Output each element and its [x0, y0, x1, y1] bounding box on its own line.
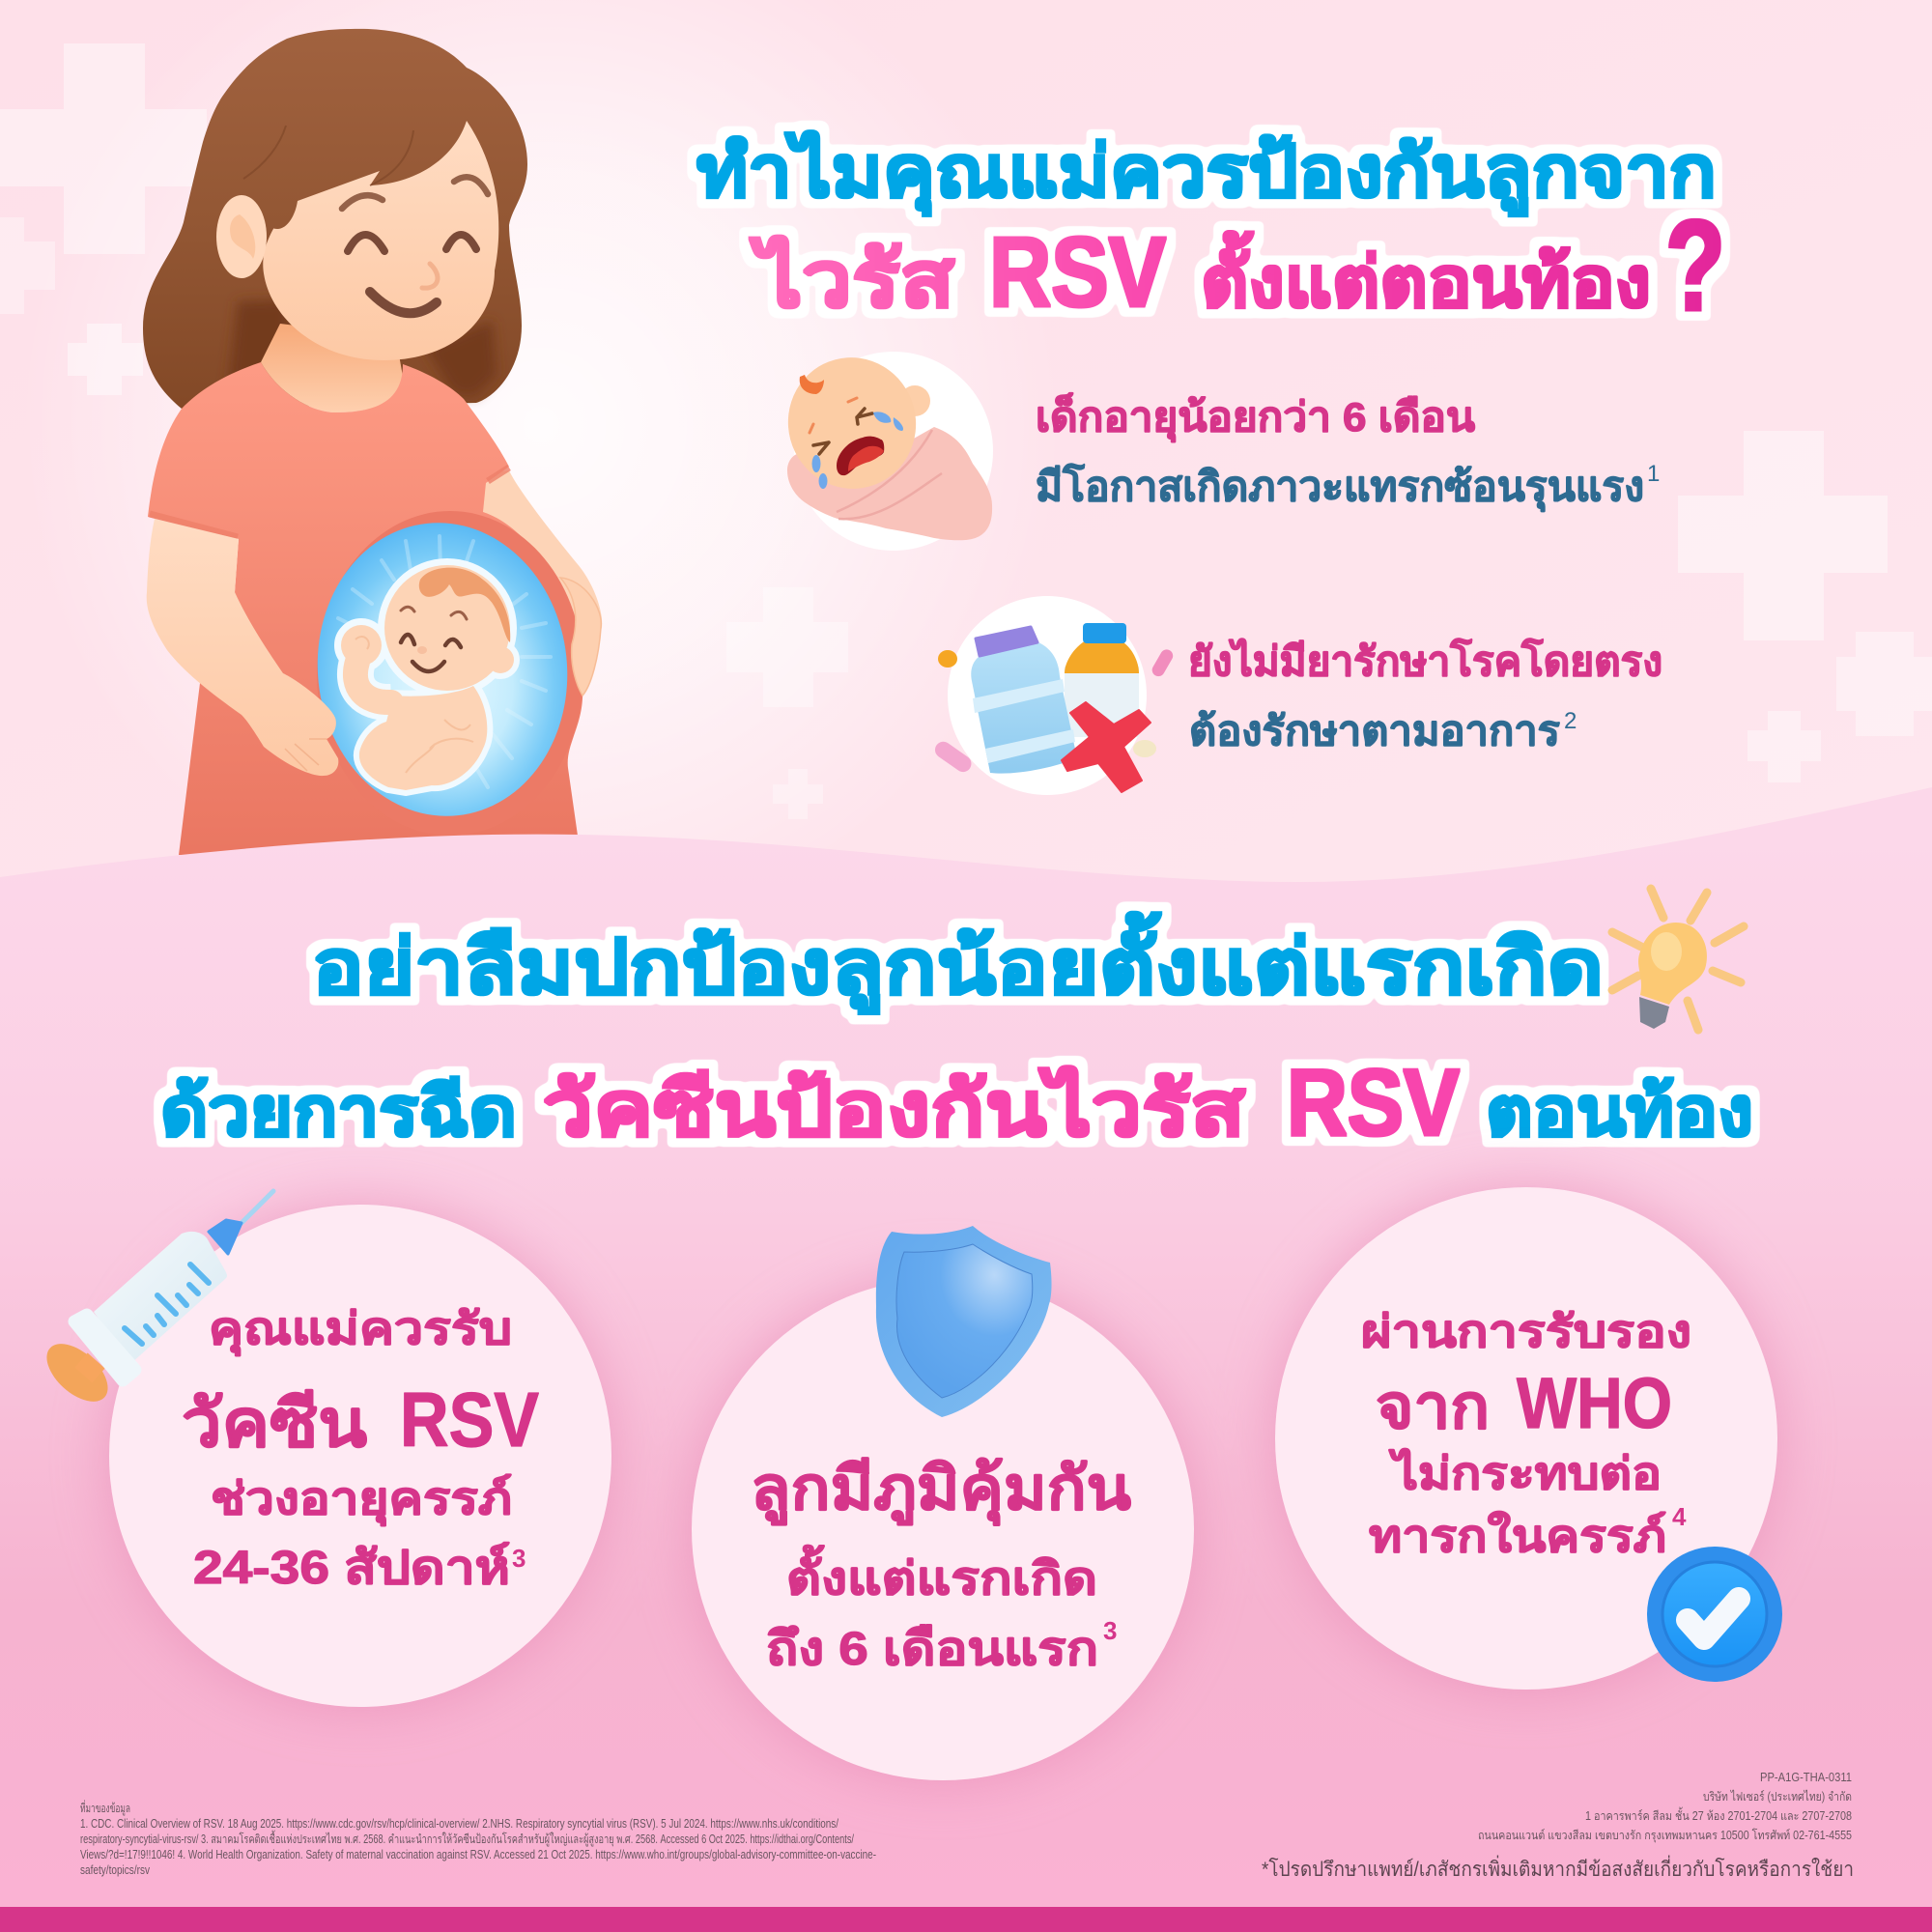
panel: circle 3 WHO approval: WHO — [1517, 1363, 1672, 1443]
panel: circle 1 vaccine timing: 24-36 สัปดาห์ — [193, 1542, 510, 1594]
left arm and hand — [147, 519, 338, 776]
panel: circle 3 WHO approval: 4 — [1672, 1502, 1687, 1531]
point 2 text — [1188, 638, 1662, 753]
womb — [303, 510, 582, 829]
heading line 2 — [160, 1049, 1753, 1155]
point 2 text: ยังไม่มียารักษาโรคโดยตรง — [1188, 638, 1662, 684]
company address and advisory — [1262, 1771, 1854, 1881]
bottom band — [0, 1907, 1932, 1932]
panel: circle 2 immunity: ตั้งแต่แรกเกิด — [786, 1545, 1097, 1604]
ear — [216, 195, 267, 278]
red cross — [1062, 702, 1151, 792]
heading line 1: อย่าลืมปกป้องลูกน้อยตั้งแต่แรกเกิด — [312, 912, 1604, 1014]
panel: circle 1 vaccine timing: คุณแม่ควรรับ — [209, 1303, 512, 1356]
title line 2 — [749, 194, 1725, 338]
right hand — [560, 578, 601, 696]
blanket — [787, 427, 992, 540]
brow marks — [810, 398, 857, 433]
neck — [261, 324, 403, 412]
pills — [932, 647, 1176, 775]
panel: circle 2 immunity: 3 — [1103, 1616, 1117, 1645]
panel: circle 3 WHO approval: ไม่กระทบต่อ — [1387, 1448, 1662, 1498]
hair strand shading — [243, 126, 413, 185]
heading line 2: ตอนท้อง — [1486, 1074, 1753, 1150]
circle shadows — [107, 1185, 1779, 1782]
title line 2: ไวรัส — [749, 235, 954, 323]
arm behind belly — [464, 470, 602, 676]
panel: circle 3 WHO approval: จาก — [1376, 1372, 1490, 1441]
point 2 text: ต้องรักษาตามอาการ — [1189, 708, 1560, 753]
fringe — [217, 33, 467, 229]
heading — [160, 912, 1753, 1155]
icon: syringe — [37, 1191, 273, 1412]
panel: circle 1 vaccine timing: วัคซีน — [182, 1387, 367, 1461]
company address and advisory: ถนนคอนแวนต์ แขวงสีลม เขตบางรัก กรุงเทพมหานคร 10500 โทรศัพท์ 02-761-4555 — [1478, 1828, 1852, 1843]
orange bottle — [1065, 623, 1139, 737]
baby in womb — [340, 564, 514, 790]
panel: circle 2 immunity — [692, 1278, 1194, 1780]
panel: circle 2 immunity: ลูกมีภูมิคุ้มกัน — [751, 1456, 1131, 1525]
icon: light bulb — [1612, 889, 1744, 1030]
curl — [800, 375, 824, 394]
icon: shield — [876, 1226, 1052, 1417]
finger lines — [285, 739, 327, 771]
references — [80, 1800, 876, 1877]
panel: circle 1 vaccine timing: 3 — [512, 1544, 526, 1573]
point 1 text: เด็กอายุน้อยกว่า 6 เดือน — [1036, 392, 1475, 442]
references: Views/?d=!17!9!!1046! 4. World Health Organization. Safety of maternal vaccination against RSV. Accessed 21 Oct 2025. https://www.who.int/groups/global-advisory-committee-on-vaccine- — [80, 1848, 876, 1861]
panel: circle 1 vaccine timing: ช่วงอายุครรภ์ — [211, 1473, 512, 1526]
title line 2: RSV — [989, 216, 1166, 327]
sleeve cuff — [150, 468, 509, 537]
panel: circle 1 vaccine timing — [109, 1205, 611, 1707]
point 1: crying baby icon — [774, 343, 993, 551]
point 1 text: 1 — [1647, 461, 1660, 487]
blue bottle — [971, 627, 1077, 774]
ear — [899, 385, 930, 416]
references: ที่มาของข้อมูล — [80, 1800, 130, 1816]
title line 1: ทำไมคุณแม่ควรป้องกันลูกจาก — [696, 129, 1717, 216]
panel: circle 3 WHO approval: ทารกในครรภ์ — [1369, 1510, 1666, 1561]
title — [696, 129, 1725, 338]
point 2 text: 2 — [1564, 708, 1577, 734]
head — [774, 343, 930, 503]
blanket folds — [837, 430, 942, 519]
hair — [143, 29, 527, 409]
heading line 2: RSV — [1287, 1049, 1460, 1155]
company address and advisory: PP-A1G-THA-0311 — [1760, 1771, 1852, 1784]
icon: check badge — [1647, 1547, 1782, 1682]
background crosses — [0, 43, 1932, 819]
heading line 2: วัคซีนป้องกันไวรัส — [543, 1065, 1245, 1151]
facial features — [342, 177, 488, 313]
company address and advisory: *โปรดปรึกษาแพทย์/เภสัชกรเพิ่มเติมหากมีข้อสงสัยเกี่ยวกับโรคหรือการใช้ยา — [1262, 1855, 1854, 1881]
panel: circle 3 WHO approval: ผ่านการรับรอง — [1361, 1306, 1691, 1356]
panel: circle 1 vaccine timing: RSV — [400, 1377, 539, 1463]
womb rays — [338, 536, 551, 787]
company address and advisory: บริษัท ไฟเซอร์ (ประเทศไทย) จำกัด — [1703, 1790, 1852, 1804]
point 2: medicine icon — [932, 596, 1176, 795]
illustration: pregnant mother — [143, 29, 602, 855]
panel: circle 2 immunity: ถึง 6 เดือนแรก — [766, 1624, 1098, 1675]
crying face — [837, 437, 884, 475]
point 1 text: มีโอกาสเกิดภาวะแทรกซ้อนรุนแรง — [1036, 463, 1644, 512]
title line 2: ตั้งแต่ตอนท้อง — [1201, 231, 1651, 322]
title line 2: ? — [1665, 194, 1725, 338]
references: respiratory-syncytial-virus-rsv/ 3. สมาคมโรคติดเชื้อแห่งประเทศไทย พ.ศ. 2568. คำแนะนำการให้วัคซีนป้องกันโรคสำหรับผู้ใหญ่และผู้สูงอายุ พ.ศ. 2568. Accessed 6 Oct 2025. https://idthai.org/Contents/ — [80, 1830, 854, 1847]
dress — [148, 362, 582, 855]
face — [263, 121, 498, 360]
heading line 2: ด้วยการฉีด — [160, 1074, 517, 1150]
background: lower wave panel — [0, 787, 1932, 1932]
references: safety/topics/rsv — [80, 1863, 151, 1877]
belly rim — [317, 511, 583, 836]
point 1 text — [1036, 392, 1660, 512]
company address and advisory: 1 อาคารพาร์ค สีลม ชั้น 27 ห้อง 2701-2704 และ 2707-2708 — [1585, 1806, 1852, 1823]
panel: circle 3 WHO approval — [1275, 1187, 1777, 1690]
references: 1. CDC. Clinical Overview of RSV. 18 Aug 2025. https://www.cdc.gov/rsv/hcp/clinical-overview/ 2.NHS. Respiratory syncytial virus (RSV). 5 Jul 2024. https://www.nhs.uk/conditions/ — [80, 1817, 838, 1831]
background: upper area — [0, 0, 1932, 898]
